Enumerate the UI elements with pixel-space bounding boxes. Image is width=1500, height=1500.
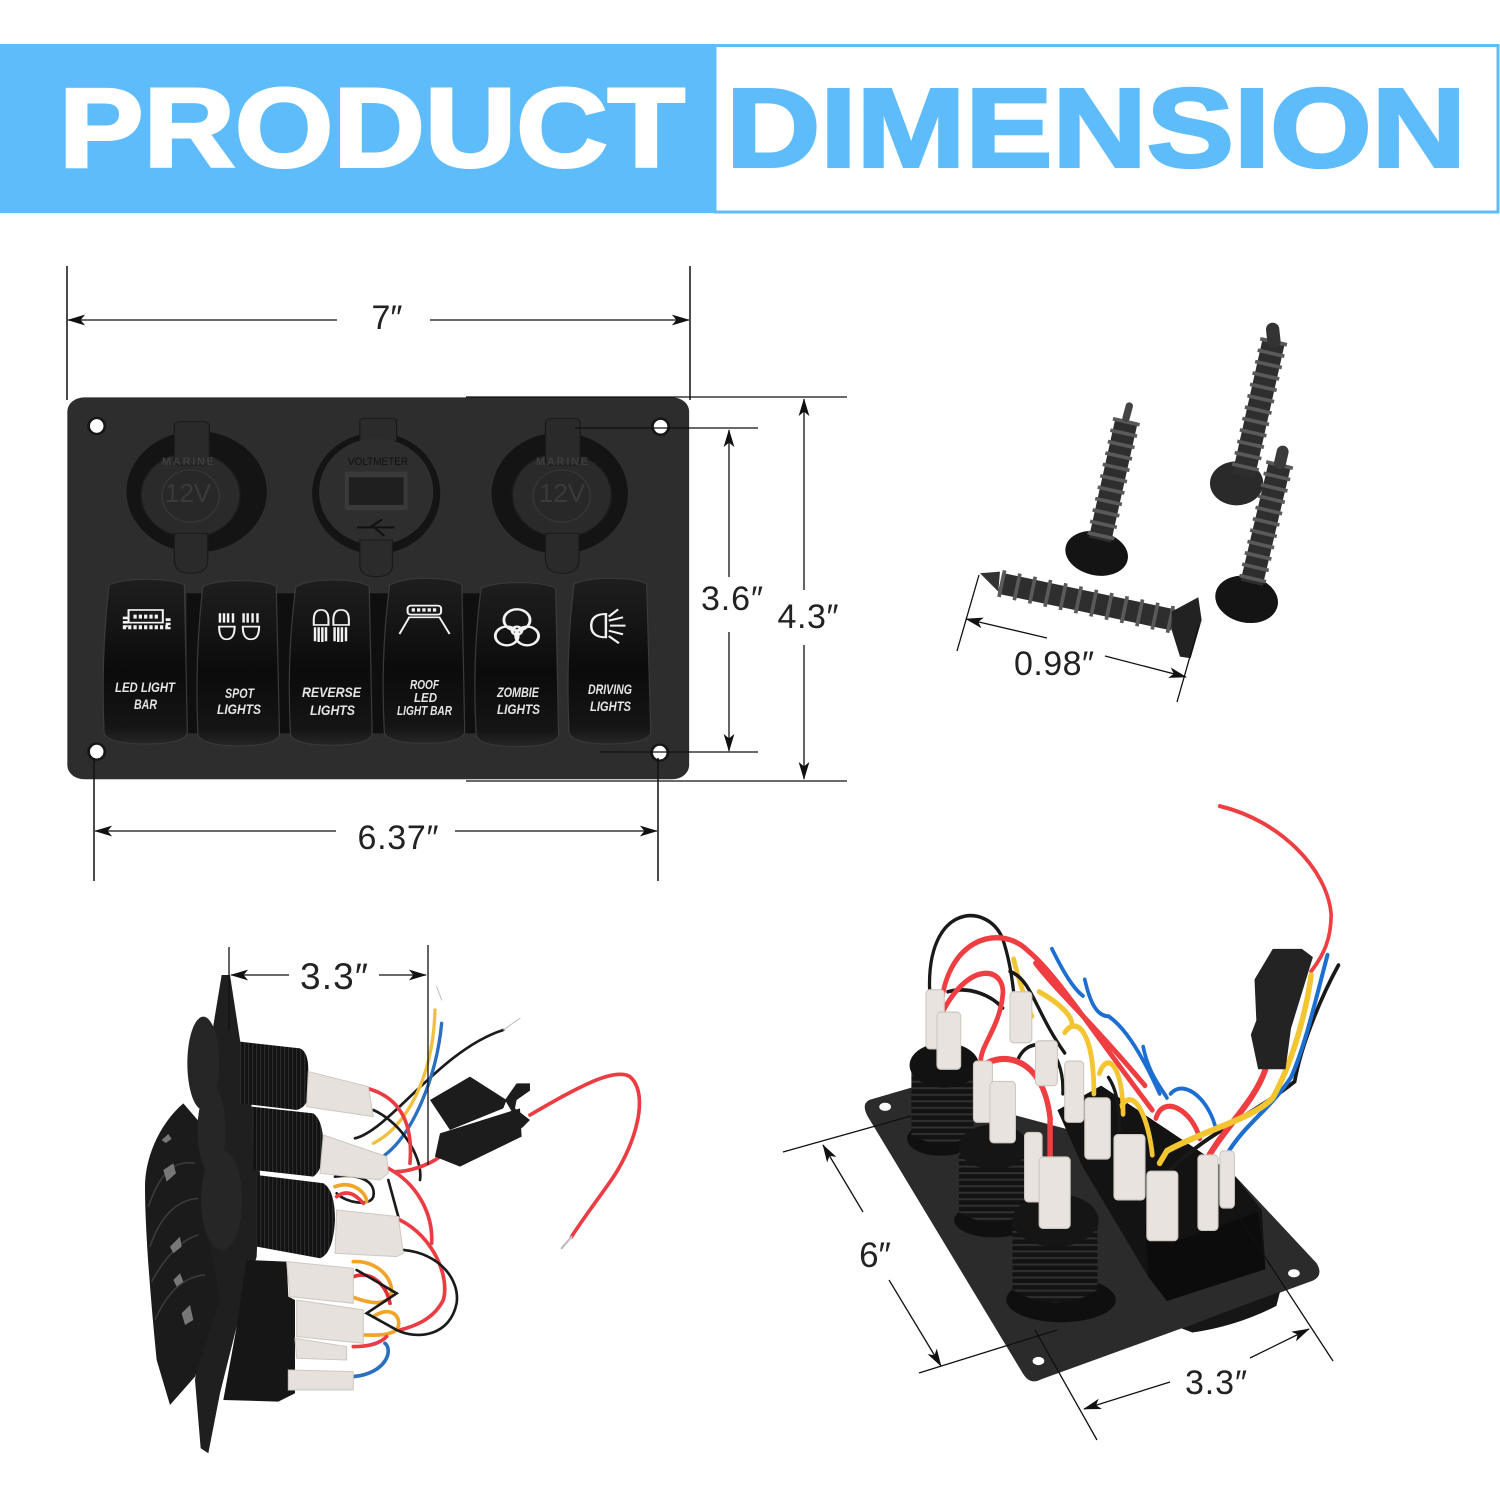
- rocker switch: driving lights: [568, 578, 651, 744]
- socket: left 12V: [127, 422, 267, 573]
- screw: right: [1211, 452, 1283, 629]
- dimension: panel height 4.3 inch: 4.3″: [778, 598, 838, 636]
- icon: spot lights: [219, 613, 259, 639]
- screw: upper right: [1210, 329, 1274, 505]
- socket label: voltmeter: VOLTMETER: [348, 456, 408, 468]
- socket label: left marine: MARINE: [162, 456, 214, 468]
- screw: horizontal measured: [980, 572, 1202, 658]
- inline fuse holder: [430, 1077, 530, 1167]
- icon: reverse lights: [314, 610, 349, 642]
- socket: voltmeter USB: [312, 418, 440, 577]
- rocker switch: reverse lights: [289, 580, 372, 745]
- rocker switch: LED light bar: [103, 579, 187, 744]
- screws group: [980, 329, 1283, 658]
- switch label: roof LED light bar: LIGHT BAR: [397, 704, 452, 718]
- dimension: panel width 7 inch: [67, 266, 690, 400]
- dimension: screw length 0.98 inch: [957, 575, 1199, 702]
- socket label: left 12V: 12V: [165, 478, 212, 508]
- dimension: hole spacing 3.6 inch: 3.6″: [701, 580, 763, 618]
- socket: right 12V: [492, 418, 628, 573]
- dimension: side depth 3.3 inch: 3.3″: [300, 956, 368, 997]
- heading word: PRODUCT: PRODUCT: [59, 66, 685, 190]
- rocker switch: roof LED light bar: [383, 578, 465, 743]
- wires: rear view: [929, 806, 1338, 1173]
- wires: side view: [335, 987, 639, 1377]
- dimension: rear height 6 inch: 6″: [859, 1236, 891, 1275]
- dimension: side depth 3.3 inch: [229, 945, 428, 1165]
- rocker switches: side: [145, 1103, 220, 1405]
- switch label: driving lights: DRIVING: [588, 681, 632, 697]
- switch label: spot lights: SPOT: [225, 685, 255, 701]
- rocker rear body: [1145, 1212, 1265, 1301]
- switch label: reverse lights: REVERSE: [302, 684, 362, 700]
- rear switch bodies: [1057, 1086, 1265, 1300]
- dimension: rear width 3.3 inch: [1035, 1208, 1333, 1440]
- switch label: zombie lights: LIGHTS: [497, 701, 541, 717]
- switch label: LED light bar: LED LIGHT: [115, 679, 176, 695]
- wire terminals: [926, 990, 1234, 1241]
- switch label: LED light bar: BAR: [134, 696, 158, 712]
- icon: driving lights: [591, 609, 625, 643]
- socket label: right 12V: 12V: [539, 478, 586, 508]
- switch label: reverse lights: LIGHTS: [310, 702, 356, 718]
- wire terminals: [287, 1072, 403, 1390]
- rocker switch: zombie lights: [475, 583, 559, 747]
- panel: front view of switch panel: [67, 397, 689, 779]
- dimension: hole spacing 3.6 inch: [575, 428, 763, 752]
- dimension: hole spacing 6.37 inch: [94, 758, 658, 881]
- header banner: [0, 44, 1498, 213]
- dimension: screw length 0.98 inch: 0.98″: [1014, 645, 1094, 683]
- dimension: rear width 3.3 inch: 3.3″: [1185, 1364, 1247, 1402]
- icon: LED light bar: [125, 610, 168, 627]
- dimension: panel height 4.3 inch: [466, 397, 847, 781]
- switch label: roof LED light bar: ROOF: [410, 678, 439, 692]
- switch label: roof LED light bar: LED: [414, 691, 437, 705]
- rocker switch: spot lights: [197, 581, 280, 746]
- dimension: panel width 7 inch: 7″: [372, 299, 402, 337]
- switch label: spot lights: LIGHTS: [217, 701, 262, 717]
- dimension: rear height 6 inch: [783, 1116, 1057, 1373]
- icon: roof light bar: [399, 606, 450, 634]
- rear switch body: [223, 1260, 295, 1402]
- threaded barrels: [240, 1042, 335, 1258]
- mounting plate: [195, 975, 260, 1453]
- socket barrels: [907, 1043, 1116, 1322]
- heading word: DIMENSION: DIMENSION: [726, 66, 1466, 190]
- socket label: right marine: MARINE: [536, 456, 588, 468]
- icon: biohazard: [495, 609, 539, 645]
- switch label: zombie lights: ZOMBIE: [496, 684, 540, 700]
- side view of panel with wiring: [145, 975, 639, 1453]
- dimension: hole spacing 6.37 inch: 6.37″: [358, 819, 438, 857]
- socket caps: [187, 1017, 242, 1250]
- screw: centre: [1061, 406, 1132, 581]
- inline fuse holder: [1251, 949, 1313, 1069]
- rear view of panel with wiring: [865, 806, 1338, 1381]
- mounting plate: [865, 1088, 1319, 1381]
- switch label: driving lights: LIGHTS: [590, 698, 632, 714]
